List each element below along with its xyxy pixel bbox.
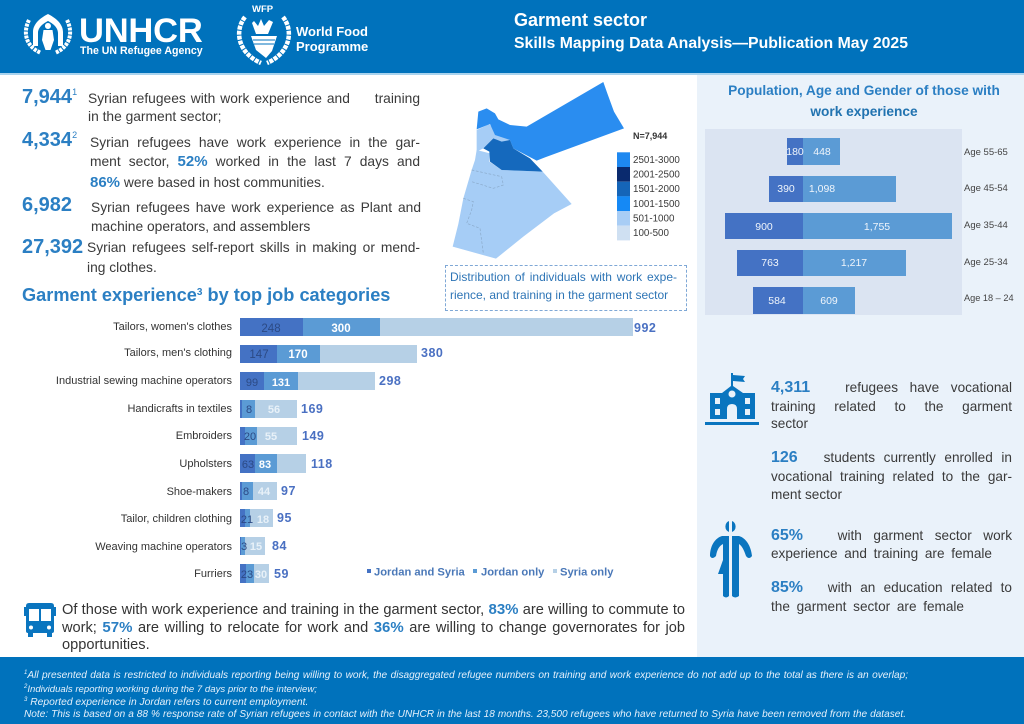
text: Syrian refugees have work experience as Plant and [91, 200, 421, 215]
icon: UNHCR emblem [24, 14, 72, 54]
row: Industrial sewing machine operators: Industrial sewing machine operators [56, 375, 232, 387]
footnote 3: 3 Reported experience in Jordan refers to current employment. [24, 697, 308, 708]
row: Furriers: 59 [274, 567, 289, 581]
text line 2: ment sector, 52% worked in the last 7 days and [90, 153, 420, 170]
chart legend: Jordan only [481, 566, 545, 578]
age 25-34 [737, 250, 1008, 276]
stat 4,311 [771, 379, 1012, 431]
row: Furriers: 23 [241, 569, 253, 581]
logo text: World Food Programme [296, 24, 368, 54]
line 1: 85% with an education related to [771, 579, 1012, 596]
row: Tailors, men's clothing: 170 [288, 349, 308, 361]
line 2: training related to the garment [771, 399, 1012, 414]
row: Embroiders [176, 427, 324, 445]
caption line 1: Distribution of individuals with work expe- [450, 270, 677, 284]
logo text: UNHCR: UNHCR [79, 12, 203, 50]
row: Tailor, children clothing: 95 [277, 511, 292, 525]
row: Weaving machine operators: 3 [241, 541, 247, 553]
row: Weaving machine operators [95, 537, 287, 555]
title line 1: Garment sector [514, 10, 647, 30]
stat 85% [771, 579, 1012, 614]
logo label: WFP: WFP [252, 4, 273, 15]
text: Syrian refugees with work experience and training [88, 91, 420, 106]
stat 6,982 [22, 194, 421, 234]
row: Handicrafts in textiles: 56 [268, 404, 280, 416]
line 2: the garment sector are female [771, 599, 964, 614]
stat 4,334 [22, 129, 420, 191]
line 2: vocational training related to the gar- [771, 469, 1012, 484]
row: Shoe-makers: 44 [258, 486, 271, 498]
map sample size: N=7,944 [633, 131, 667, 141]
icon: gender figure [710, 521, 752, 598]
map legend: 1501-2000 [633, 184, 680, 195]
row: Tailors, women's clothes: 248 [261, 323, 281, 335]
text: Syrian refugees self-report skills in making or mend- [87, 240, 420, 255]
icon: WFP wreath emblem [236, 16, 292, 65]
line 2: experience and training are female [771, 546, 992, 561]
line 1: 65% with garment sector work [771, 527, 1012, 544]
heading: population, age and gender: Population, Age and Gender of those with [728, 83, 1000, 98]
map regions [453, 82, 624, 259]
stat 126 [771, 449, 1012, 502]
row: Tailor, children clothing: 18 [257, 514, 269, 526]
footnote 2: 2Individuals reporting working during the 7 days prior to the interview; [24, 684, 317, 695]
age 35-44: 900 [755, 221, 773, 233]
row: Tailors, men's clothing: Tailors, men's clothing [124, 347, 232, 359]
row: Tailors, women's clothes: 300 [331, 323, 351, 335]
bar chart: garment experience by job category [56, 318, 656, 583]
row: Shoe-makers: 97 [281, 484, 296, 498]
row: Upholsters: 83 [259, 459, 271, 471]
row: Handicrafts in textiles: 8 [246, 404, 252, 416]
row: Tailor, children clothing: 21 [241, 514, 253, 526]
row: Upholsters: Upholsters [179, 458, 232, 470]
age 45-54: Age 45-54 [964, 183, 1008, 194]
row: Handicrafts in textiles: 169 [301, 402, 323, 416]
section heading: garment experience: Garment experience3 by top job categories [22, 285, 390, 305]
population pyramid chart [705, 129, 1014, 315]
line 3: ment sector [771, 487, 842, 502]
row: Industrial sewing machine operators [56, 372, 401, 390]
text: Syrian refugees have work experience in the gar- [90, 135, 420, 150]
age 18-24 [753, 287, 1014, 314]
age 45-54: 390 [777, 183, 795, 195]
stats block: key figures [22, 86, 421, 275]
header band [0, 0, 1024, 75]
heading: population, age and gender: work experience [810, 104, 918, 119]
row: Tailors, women's clothes: 992 [634, 321, 656, 335]
line 1: Of those with work experience and training in the garment sector, 83% are willing to commute to [62, 601, 685, 618]
row: Furriers [194, 564, 289, 583]
row: Shoe-makers: 8 [243, 486, 249, 498]
row: Tailors, men's clothing: 147 [249, 349, 269, 361]
row: Furriers: Furriers [194, 568, 232, 580]
map of Jordan with legend [452, 82, 680, 259]
row: Tailors, women's clothes: Tailors, women's clothes [113, 321, 232, 333]
age 45-54: 1,098 [809, 183, 835, 195]
footnote 1: 1All presented data is restricted to individuals reporting being willing to work, the disaggregated refugee numbers on training and work experience do not add up to the total as there is an overlap; [24, 670, 908, 681]
line 1: 126 students currently enrolled in [771, 449, 1012, 466]
row: Embroiders: 55 [265, 431, 277, 443]
number: 4,3342 [22, 129, 77, 151]
right side panel background [697, 75, 1024, 657]
map legend: 2001-2500 [633, 170, 680, 180]
line 3: sector [771, 416, 808, 431]
map legend: 1001-1500 [633, 199, 680, 210]
line 3: opportunities. [62, 637, 150, 653]
age 25-34: 763 [761, 257, 779, 269]
age 55-65 [786, 138, 1008, 165]
map legend: 501-1000 [633, 214, 675, 224]
vocational training text [771, 379, 1012, 502]
row: Industrial sewing machine operators: 298 [379, 374, 401, 388]
row: Upholsters [179, 454, 333, 473]
chart legend: Syria only [560, 566, 614, 578]
row: Embroiders: 149 [302, 429, 324, 443]
age 25-34: 1,217 [841, 257, 867, 269]
number: 7,9441 [22, 86, 77, 108]
text line 3: 86% were based in host communities. [90, 174, 325, 191]
row: Tailors, women's clothes [113, 318, 656, 336]
row: Tailor, children clothing [121, 509, 292, 527]
map caption [445, 265, 687, 311]
logo: World Food Programme [236, 4, 368, 65]
text line 2: machine operators, and assemblers [91, 219, 310, 234]
row: Tailor, children clothing: Tailor, children clothing [121, 513, 232, 525]
age 18-24: Age 18 – 24 [964, 293, 1014, 303]
age 25-34: Age 25-34 [964, 257, 1008, 268]
number: 6,982 [22, 194, 72, 216]
logo text: World Food Programme: World Food [296, 24, 368, 39]
header title [514, 10, 908, 52]
age 18-24: 609 [820, 295, 838, 307]
chart legend [367, 566, 614, 578]
row: Tailors, men's clothing: 380 [421, 346, 443, 360]
row: Upholsters: 118 [311, 457, 333, 471]
age 45-54 [769, 176, 1008, 202]
stat 27,392 [22, 236, 420, 275]
map legend: 100-500 [633, 228, 670, 239]
logo tagline: The UN Refugee Agency [80, 45, 203, 57]
row: Shoe-makers: Shoe-makers [167, 486, 232, 498]
row: Tailors, men's clothing [124, 345, 443, 363]
age 55-65: Age 55-65 [964, 147, 1008, 158]
age 18-24: 584 [768, 295, 786, 307]
age 35-44 [725, 213, 1008, 239]
text line 2: ing clothes. [87, 260, 157, 275]
age 55-65: 180 [786, 146, 804, 158]
row: Handicrafts in textiles [127, 400, 323, 418]
row: Furriers: 30 [255, 569, 267, 581]
row: Embroiders: Embroiders [176, 430, 232, 442]
age 55-65: 448 [813, 146, 831, 158]
logo text: World Food Programme: Programme [296, 39, 368, 54]
icon: bus [24, 603, 56, 637]
line 2: work; 57% are willing to relocate for work and 36% are willing to change governorates for job [62, 619, 685, 636]
footer band with footnotes [0, 657, 1024, 724]
row: Industrial sewing machine operators: 99 [246, 377, 258, 389]
row: Weaving machine operators: 84 [272, 539, 287, 553]
row: Shoe-makers [167, 482, 296, 500]
mobility text [62, 601, 685, 653]
title line 2: Skills Mapping Data Analysis—Publication May 2025 [514, 35, 908, 52]
row: Weaving machine operators: 15 [250, 541, 262, 553]
row: Embroiders: 20 [244, 431, 256, 443]
age 35-44: 1,755 [864, 221, 890, 233]
age 35-44: Age 35-44 [964, 220, 1008, 231]
logo: UNHCR [24, 12, 203, 57]
gender text [771, 527, 1012, 614]
row: Upholsters: 63 [242, 459, 254, 471]
line 1: 4,311 refugees have vocational [771, 379, 1012, 396]
map legend: 2501-3000 [633, 155, 680, 166]
caption line 2: rience, and training in the garment sector [450, 288, 668, 302]
row: Weaving machine operators: Weaving machine operators [95, 541, 232, 553]
note: Note: This is based on a 88 % response rate of Syrian refugees in contact with the UNHCR in the last 18 months. 23,500 refugees who have returned to Syria have been removed from the dataset. [24, 709, 906, 720]
map legend [617, 152, 680, 240]
chart legend: Jordan and Syria [374, 566, 466, 578]
stat 65% [771, 527, 1012, 561]
heading: population, age and gender [728, 83, 1000, 119]
number: 27,392 [22, 236, 83, 258]
row: Industrial sewing machine operators: 131 [272, 377, 290, 389]
row: Handicrafts in textiles: Handicrafts in textiles [127, 403, 232, 415]
icon: school building [705, 373, 759, 425]
stat 7,944 [22, 86, 420, 124]
text line 2: in the garment sector; [88, 109, 221, 124]
